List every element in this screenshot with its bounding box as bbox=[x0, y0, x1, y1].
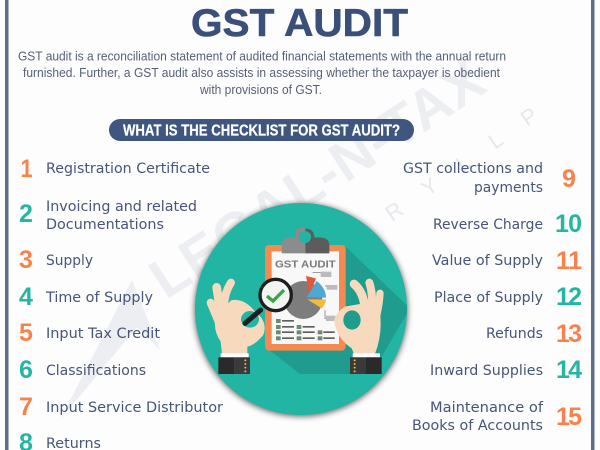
watermark: LEGAL-N-TAX bbox=[138, 48, 495, 310]
item 10: 10 bbox=[555, 210, 582, 238]
checklist heading pill: WHAT IS THE CHECKLIST FOR GST AUDIT? bbox=[123, 122, 400, 140]
item 9: payments bbox=[474, 180, 543, 196]
item 13: Refunds bbox=[486, 326, 543, 342]
checklist rows bbox=[276, 319, 335, 340]
item 4 bbox=[19, 283, 153, 311]
pie chart bbox=[284, 272, 337, 321]
item 3: Supply bbox=[46, 253, 93, 269]
item 6: 6 bbox=[19, 356, 33, 384]
right checklist items 9 to 15 bbox=[403, 161, 582, 434]
right sleeve bbox=[350, 353, 382, 374]
teal circle bbox=[195, 203, 407, 415]
item 10: Reverse Charge bbox=[433, 217, 543, 233]
item 7 bbox=[19, 393, 223, 421]
item 8 bbox=[19, 429, 101, 450]
item 4: Time of Supply bbox=[45, 290, 153, 306]
clipboard long shadow bbox=[270, 247, 410, 374]
item 7: 7 bbox=[19, 393, 33, 421]
item 9: GST collections and bbox=[403, 161, 543, 177]
frame left border bbox=[5, 0, 8, 450]
item 9 bbox=[403, 161, 576, 196]
right hand bbox=[334, 283, 381, 354]
item 3 bbox=[19, 246, 93, 274]
item 1: Registration Certificate bbox=[46, 161, 210, 177]
intro paragraph: furnished. Further, a GST audit also assists in assessing whether the taxpayer is obedient bbox=[23, 65, 500, 80]
item 9: 9 bbox=[562, 165, 576, 193]
item 11: Value of Supply bbox=[432, 253, 543, 269]
item 4: 4 bbox=[19, 283, 33, 311]
item 2: Documentations bbox=[46, 217, 164, 233]
item 2: 2 bbox=[19, 200, 33, 228]
item 5: Input Tax Credit bbox=[46, 326, 161, 342]
item 7: Input Service Distributor bbox=[46, 400, 223, 416]
item 12: 12 bbox=[556, 283, 582, 311]
item 10 bbox=[433, 210, 582, 238]
left hand bbox=[211, 283, 265, 354]
frame right border bbox=[591, 0, 594, 450]
item 3: 3 bbox=[19, 246, 33, 274]
item 14: Inward Supplies bbox=[430, 363, 543, 379]
item 15 bbox=[412, 400, 582, 434]
intro paragraph bbox=[18, 48, 506, 97]
central illustration bbox=[194, 203, 410, 417]
item 5 bbox=[19, 319, 161, 347]
intro paragraph: with provisions of GST. bbox=[199, 82, 322, 97]
circle shadow bbox=[194, 203, 408, 417]
item 6: Classifications bbox=[46, 363, 146, 379]
green tick bbox=[267, 290, 284, 301]
item 12: Place of Supply bbox=[434, 290, 543, 306]
left sleeve bbox=[218, 353, 250, 374]
intro paragraph: GST audit is a reconciliation statement of audited financial statements with the annual return bbox=[18, 48, 506, 64]
watermark bbox=[60, 48, 542, 420]
item 6 bbox=[19, 356, 146, 384]
item 13 bbox=[486, 320, 582, 348]
item 1: 1 bbox=[20, 155, 33, 183]
item 15: 15 bbox=[556, 403, 582, 431]
checklist heading pill bbox=[109, 119, 414, 141]
item 14: 14 bbox=[556, 356, 582, 384]
left checklist items 1 to 8 bbox=[19, 155, 223, 450]
item 1 bbox=[20, 155, 210, 183]
item 12 bbox=[434, 283, 582, 311]
item 13: 13 bbox=[556, 320, 582, 348]
item 14 bbox=[430, 356, 582, 384]
item 11: 11 bbox=[556, 247, 582, 275]
item 2: Invoicing and related bbox=[46, 199, 197, 215]
item 2 bbox=[19, 199, 197, 233]
title: GST AUDIT bbox=[191, 2, 408, 45]
clipboard clip bbox=[282, 227, 329, 253]
clipboard bbox=[265, 227, 346, 351]
item 11 bbox=[432, 247, 582, 275]
item 15: Books of Accounts bbox=[412, 418, 543, 434]
clipboard heading: GST AUDIT bbox=[275, 259, 336, 270]
magnifying glass bbox=[245, 279, 291, 323]
watermark: R Y L L P bbox=[381, 102, 542, 226]
item 5: 5 bbox=[19, 319, 33, 347]
item 15: Maintenance of bbox=[430, 400, 544, 416]
